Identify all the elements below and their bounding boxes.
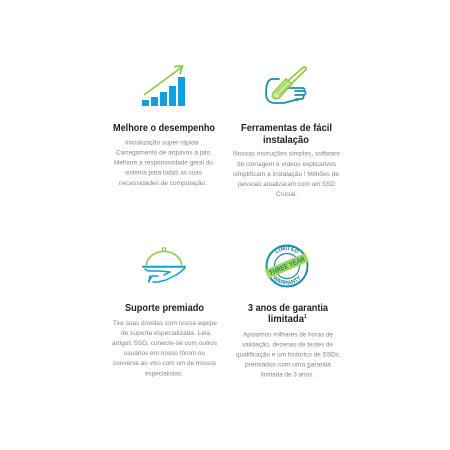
text block: desempenho description: sistema para todas as suas: [125, 170, 203, 176]
text block: suporte description: [112, 320, 218, 378]
heading: Ferramentas de fácil instalação: [241, 122, 332, 146]
text block: garantia description: premiados com uma garantia: [245, 362, 331, 368]
icon: rising bar chart with arrow: [142, 66, 185, 106]
icon: hand holding serving cloche: [143, 248, 185, 282]
panel: suporte: [112, 248, 218, 378]
text block: desempenho description: [114, 140, 213, 187]
heading: Ferramentas de fácil instalação: instalação: [263, 134, 309, 146]
text block: ferramentas description: simplificam a instalação ! Milhões de: [233, 171, 339, 178]
text block: desempenho description: Melhore a responsividade geral do: [114, 160, 213, 166]
text block: ferramentas description: de clonagem e vídeos explicativos: [237, 161, 337, 168]
icon: three year warranty stamp: [264, 244, 309, 288]
icon: three year warranty stamp: WARRANTY: [274, 276, 300, 285]
text block: suporte description: converse ao vivo com um de nossos: [113, 360, 217, 367]
icon: three year warranty stamp: LIMITED: [275, 246, 298, 254]
heading: 3 anos de garantia limitada: 1: [304, 314, 307, 320]
heading: Ferramentas de fácil instalação: Ferramentas de fácil: [241, 122, 332, 134]
heading: Suporte premiado: Suporte premiado: [125, 302, 204, 314]
text block: ferramentas description: Nossas instruções simples, software: [233, 150, 340, 158]
heading: 3 anos de garantia limitada: [248, 302, 328, 325]
text block: desempenho description: Inicialização super-rápida .: [125, 140, 202, 146]
heading: 3 anos de garantia limitada: 3 anos de garantia: [248, 302, 328, 314]
text block: ferramentas description: [233, 150, 340, 198]
heading: Melhore o desempenho: Melhore o desempenho: [113, 122, 215, 134]
text block: garantia description: limitada de 3 anos.: [261, 372, 314, 378]
text block: garantia description: [236, 332, 340, 378]
icon: hand holding screwdriver: [266, 67, 306, 103]
text block: desempenho description: necessidades de computação.: [119, 180, 207, 187]
text block: suporte description: artigos SSD, conecte-se com outros: [112, 340, 218, 347]
panel: desempenho: [113, 66, 215, 187]
icon: three year warranty stamp: THREE YEAR: [268, 256, 306, 277]
panel: ferramentas: [233, 67, 340, 198]
text block: garantia description: qualificação e um histórico de SSDs: [236, 352, 340, 358]
text block: suporte description: de suporte especializada. Leia: [121, 330, 210, 337]
text block: suporte description: Tire suas dúvidas com nossa equipe: [113, 320, 217, 327]
text block: ferramentas description: Crucial.: [276, 191, 297, 198]
text block: ferramentas description: pessoas atualizaram com um SSD: [238, 181, 335, 188]
text block: suporte description: especialistas.: [145, 370, 183, 378]
text block: suporte description: usuários em nosso fórum ou: [124, 350, 205, 357]
heading: 3 anos de garantia limitada: limitada: [268, 313, 304, 325]
panel: garantia: [236, 244, 340, 378]
text block: garantia description: validação, dezenas de testes de: [242, 342, 333, 348]
text block: desempenho description: Carregamento de arquivos a jato.: [116, 150, 212, 156]
text block: garantia description: Apoiamos milhares de horas de: [243, 332, 333, 338]
